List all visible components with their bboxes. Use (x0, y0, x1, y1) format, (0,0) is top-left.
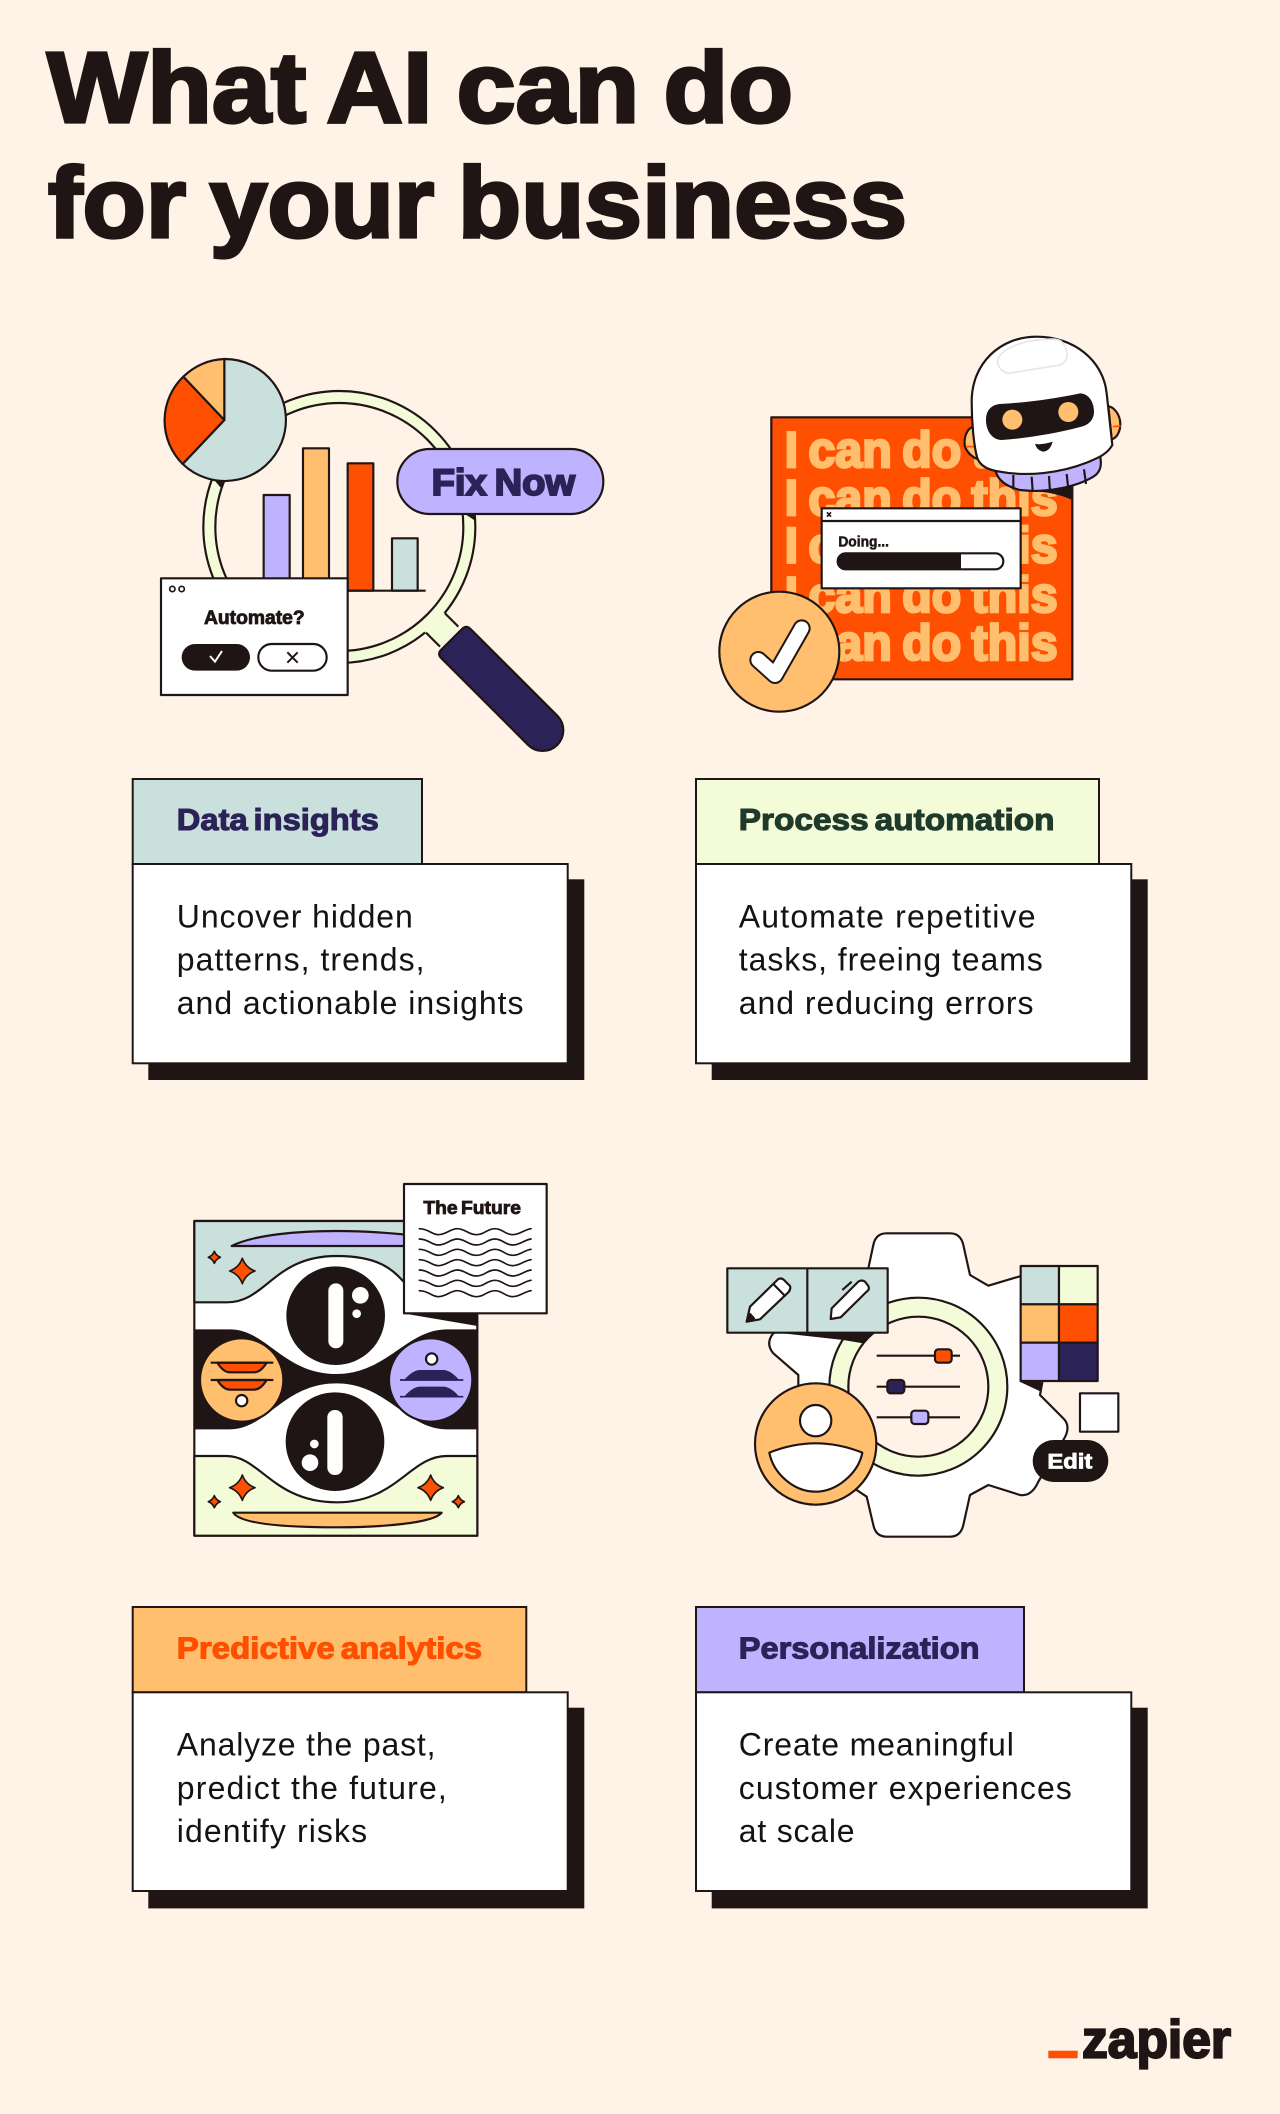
sliders (877, 1349, 960, 1424)
body text: at scale (739, 1813, 854, 1849)
lime ring (829, 1298, 1007, 1476)
purple circle (389, 1338, 472, 1422)
body text: patterns, trends, (177, 942, 424, 978)
top black circle (286, 1266, 385, 1365)
body text: and actionable insights (177, 985, 524, 1021)
body text (177, 1727, 447, 1849)
title (47, 32, 907, 259)
body text (739, 1727, 1072, 1849)
bar chart (263, 448, 426, 591)
shadow notches (215, 481, 476, 521)
purple lens (232, 1231, 410, 1246)
illustration: data insights magnifying glass (161, 359, 603, 760)
button: edit: Edit (1047, 1449, 1092, 1473)
heading: Process automation (739, 802, 1054, 837)
body text: identify risks (177, 1813, 367, 1849)
white swatch (1080, 1393, 1118, 1432)
body text: Analyze the past, (177, 1727, 436, 1763)
bottom black circle (286, 1392, 384, 1491)
orange poster with repeated text: I can do this (785, 422, 1058, 478)
teal top panel (194, 1221, 413, 1302)
icon: check badge (719, 592, 839, 712)
body text: Automate repetitive (739, 898, 1036, 934)
button: edit (1033, 1440, 1108, 1482)
orange poster with repeated text: I can do this (785, 518, 1058, 574)
colour palette (1021, 1266, 1098, 1390)
dialog: doing progress: Doing... (838, 535, 889, 551)
title: for your business (48, 147, 907, 259)
tool box: pencil and pen (727, 1268, 888, 1333)
magnifier ring (203, 391, 475, 663)
dialog: automate: Automate? (204, 608, 305, 629)
body text: and reducing errors (739, 985, 1034, 1021)
lime bottom panel (194, 1456, 477, 1536)
body text: Create meaningful (739, 1727, 1014, 1763)
dialog: doing progress (822, 508, 1021, 588)
black centre band (194, 1329, 477, 1429)
body text: predict the future, (177, 1770, 447, 1806)
heading: Personalization (739, 1630, 980, 1665)
icon: user avatar (755, 1383, 876, 1505)
button: fix now (397, 449, 603, 514)
card: data insights (133, 779, 584, 1080)
heading: Predictive analytics (177, 1630, 482, 1665)
dialog: automate (161, 578, 348, 695)
orange poster with repeated text: I can do this (785, 567, 1058, 623)
card: process automation (696, 779, 1148, 1080)
card: predictive analytics (133, 1607, 584, 1908)
illustration: process automation robot (719, 337, 1121, 712)
sparkles (208, 1251, 464, 1508)
document: the future: The Future (423, 1197, 521, 1218)
body text: customer experiences (739, 1770, 1072, 1806)
pie chart (165, 359, 286, 481)
robot (965, 337, 1121, 500)
illustration: personalization gear (727, 1233, 1118, 1537)
orange lens (233, 1513, 442, 1527)
gear (769, 1233, 1067, 1537)
card: personalization (696, 1607, 1148, 1908)
orange poster with repeated text: I can do this (785, 470, 1058, 526)
poster background (194, 1221, 477, 1536)
document: the future (404, 1184, 547, 1313)
shadow under tool box (777, 1333, 873, 1343)
button: fix now: Fix Now (432, 461, 576, 503)
orange circle (200, 1338, 283, 1422)
body text: tasks, freeing teams (739, 942, 1043, 978)
body text (739, 898, 1043, 1021)
heading: Data insights (177, 802, 379, 837)
illustration: predictive analytics poster (194, 1184, 547, 1536)
title: What AI can do (47, 32, 793, 144)
body text (177, 898, 524, 1021)
magnifier handle (437, 625, 572, 760)
logo: zapier: zapier (1082, 2010, 1231, 2070)
shadow wedge (403, 1313, 477, 1326)
body text: Uncover hidden (177, 898, 413, 934)
orange poster with repeated text: I can do this (785, 615, 1058, 671)
orange poster with repeated text (771, 417, 1072, 679)
